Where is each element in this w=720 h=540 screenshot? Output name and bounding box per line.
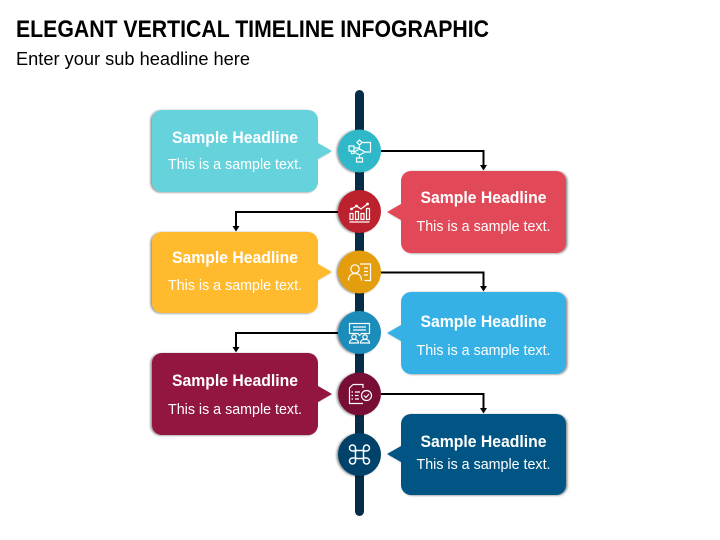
connector: step 5 to box 6 xyxy=(381,394,487,414)
connector: step 4 to box 5 xyxy=(232,333,338,352)
subtitle: Enter your sub headline here xyxy=(16,49,250,69)
connector: step 1 to box 2 xyxy=(381,151,487,170)
icon: checked document xyxy=(338,372,381,416)
headline 1: Sample Headline xyxy=(172,128,298,147)
headline 3: Sample Headline xyxy=(172,248,298,267)
text 5: This is a sample text. xyxy=(168,402,302,418)
text 2: This is a sample text. xyxy=(416,219,550,235)
connector: step 3 to box 4 xyxy=(381,272,487,292)
headline 4: Sample Headline xyxy=(420,312,546,331)
panel: callout 6 xyxy=(387,414,566,495)
icon: bar chart with trend xyxy=(338,190,381,233)
text 3: This is a sample text. xyxy=(168,278,302,294)
text 4: This is a sample text. xyxy=(416,343,550,359)
text 1: This is a sample text. xyxy=(168,157,302,173)
panel: callout 4 xyxy=(387,292,566,374)
icon: flowchart xyxy=(338,130,381,172)
timeline spine xyxy=(355,90,364,516)
panel: callout 1 xyxy=(152,110,332,192)
headline 2: Sample Headline xyxy=(420,188,546,207)
headline 5: Sample Headline xyxy=(172,371,298,390)
icon: profile card xyxy=(338,250,381,294)
title: ELEGANT VERTICAL TIMELINE INFOGRAPHIC xyxy=(16,16,489,43)
icon: command symbol xyxy=(338,433,381,476)
connector: step 2 to box 3 xyxy=(232,212,338,232)
icon: people in discussion xyxy=(338,311,381,354)
panel: callout 2 xyxy=(387,171,566,253)
panel: callout 3 xyxy=(152,232,332,313)
panel: callout 5 xyxy=(152,353,332,435)
headline 6: Sample Headline xyxy=(420,432,546,451)
text 6: This is a sample text. xyxy=(416,457,550,473)
